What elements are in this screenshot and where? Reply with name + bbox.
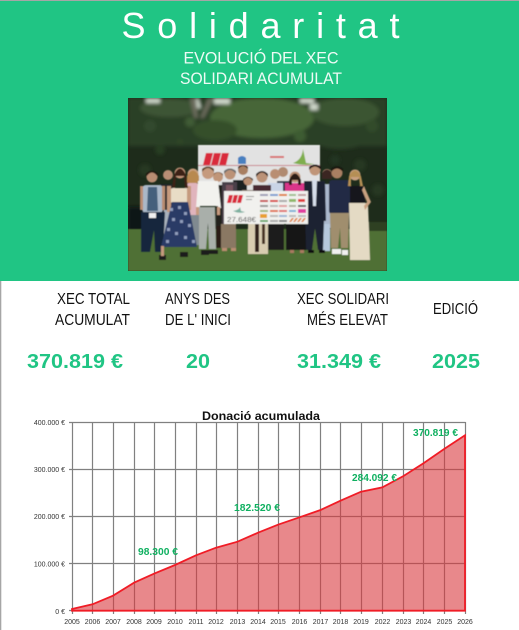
back row <box>160 184 172 212</box>
value: total: 370.819 € <box>27 350 124 373</box>
value: highest: 31.349 € <box>297 350 382 373</box>
x axis labels: 2024 <box>416 619 431 626</box>
x axis labels: 2010 <box>167 619 183 626</box>
person: blonde woman <box>350 186 365 204</box>
data labels: 370.819 € <box>413 428 458 439</box>
x axis labels: 2007 <box>105 619 121 626</box>
x axis labels: 2008 <box>126 619 142 626</box>
value: edition: 2025 <box>432 350 480 373</box>
chart title: Donació acumulada <box>202 409 320 423</box>
x axis labels: 2015 <box>270 619 286 626</box>
cheque amount: 27.648€ <box>227 215 257 224</box>
area series <box>72 435 465 611</box>
cheque <box>224 191 308 224</box>
person: woman in navy skirt <box>170 188 188 203</box>
person: man in suit <box>304 181 326 250</box>
x axis labels: 2018 <box>333 619 348 626</box>
person: man in navy shirt <box>329 180 350 214</box>
y axis labels: 300.000 € <box>34 467 65 474</box>
data labels: 98.300 € <box>138 547 178 558</box>
data labels: 284.092 € <box>352 473 397 484</box>
label: anys des de l'inici: DE L' INICI <box>165 312 231 329</box>
banner <box>197 145 321 191</box>
x axis labels: 2012 <box>208 619 224 626</box>
x axis labels: 2006 <box>85 619 100 626</box>
y axis labels: 200.000 € <box>34 514 65 521</box>
x axis labels: 2005 <box>64 619 80 626</box>
label: xec solidari més elevat: MÉS ELEVAT <box>307 312 388 329</box>
subtitle: SOLIDARI ACUMULAT <box>180 70 342 88</box>
label: edició: EDICIÓ <box>433 301 478 318</box>
x axis labels: 2014 <box>250 619 266 626</box>
person: man in white tee <box>196 181 221 208</box>
x axis labels: 2026 <box>457 619 473 626</box>
label: xec total acumulat: ACUMULAT <box>55 312 130 329</box>
x axis labels: 2011 <box>188 619 204 626</box>
y axis labels <box>34 420 65 616</box>
value: years: 20 <box>186 350 210 373</box>
x axis labels: 2016 <box>292 619 307 626</box>
person: woman in dark top <box>222 182 237 224</box>
area chart <box>34 409 473 626</box>
label: anys des de l'inici <box>165 291 231 329</box>
x axis labels: 2019 <box>353 619 369 626</box>
label: xec solidari més elevat: XEC SOLIDARI <box>297 291 389 308</box>
person: man with dark trousers <box>268 222 284 250</box>
data labels: 182.520 € <box>234 503 280 514</box>
x axis labels <box>64 619 473 626</box>
subtitle: EVOLUCIÓ DEL XEC <box>184 48 339 68</box>
x axis labels: 2022 <box>375 619 390 626</box>
x axis labels: 2009 <box>146 619 162 626</box>
people <box>140 164 371 260</box>
y axis labels: 400.000 € <box>34 420 65 427</box>
stat values <box>27 350 480 373</box>
data labels <box>138 428 458 558</box>
stat labels <box>55 291 478 329</box>
y axis labels: 100.000 € <box>34 562 65 568</box>
label: xec solidari més elevat <box>297 291 389 329</box>
x axis labels: 2013 <box>230 619 245 626</box>
group photo <box>128 98 387 271</box>
person: woman with patterned trousers <box>253 185 271 192</box>
x axis labels: 2017 <box>313 619 328 626</box>
label: xec total acumulat <box>55 291 130 329</box>
header panel <box>0 0 519 281</box>
person: woman in pink jacket <box>285 183 307 192</box>
subtitle <box>180 48 342 88</box>
lawn <box>128 229 387 271</box>
y axis labels: 0 € <box>55 609 65 616</box>
label: anys des de l'inici: ANYS DES <box>165 291 230 308</box>
person: woman with patterned top <box>142 185 163 213</box>
title: Solidaritat <box>122 5 400 46</box>
x axis labels: 2023 <box>396 619 411 626</box>
label: xec total acumulat: XEC TOTAL <box>57 291 130 308</box>
x axis labels: 2025 <box>437 619 452 626</box>
